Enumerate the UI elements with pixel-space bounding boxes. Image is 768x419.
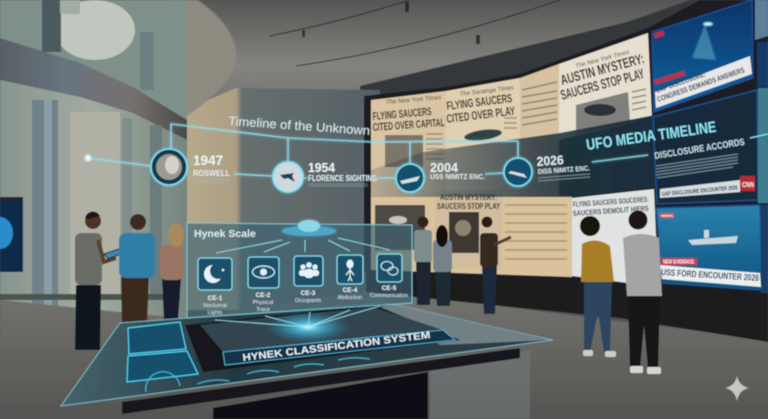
icon card: CE-1 nocturnal lights xyxy=(198,258,232,316)
node: 2004 USS Nimitz: 2004 xyxy=(430,160,459,175)
glass legs xyxy=(430,350,530,419)
person: visitor in grey xyxy=(414,216,432,305)
lower glass wall xyxy=(0,80,187,332)
newspaper: flying saucers play: CITED OVER PLAY xyxy=(446,104,516,126)
icon card: CE-4 abduction: CE-4 xyxy=(343,287,358,294)
screen: USS Ford encounter xyxy=(656,205,762,290)
newspaper: austin mystery lower xyxy=(435,190,502,268)
person: man with tablet xyxy=(75,212,126,350)
wall screen: earth display xyxy=(0,197,23,272)
newspaper: flying saucers capital: The New York Times xyxy=(386,95,441,106)
people: right pair xyxy=(580,210,662,374)
icon card: CE-1 nocturnal lights: Nocturnal xyxy=(203,303,227,309)
newspaper: flying saucers capital: FLYING SAUCERS xyxy=(372,106,432,123)
glow rays xyxy=(215,306,380,327)
icon card: CE-2 physical trace: CE-2 xyxy=(256,292,271,299)
table underside beam xyxy=(122,348,520,414)
newspaper: flying saucers play: FLYING SAUCERS xyxy=(446,91,513,113)
translucent timeline band xyxy=(371,115,657,197)
rotunda overhang xyxy=(167,0,236,116)
side screens strip xyxy=(750,0,768,293)
media wall frame xyxy=(364,0,768,300)
node: 1954 Florence sighting xyxy=(273,160,377,192)
right glass reflection xyxy=(380,303,552,345)
newspaper: lower wide xyxy=(371,196,572,277)
icon card: CE-5 communication xyxy=(370,254,408,299)
newspaper: flying saucers play: The Saratoga Times xyxy=(460,85,514,98)
icon card: CE-5 communication: CE-5 xyxy=(382,285,397,292)
upper glass gallery xyxy=(0,0,187,120)
screen: disclosure accords xyxy=(585,90,758,204)
sparkle mark xyxy=(725,376,749,401)
node: 1954 Florence sighting: FLORENCE SIGHTING xyxy=(308,174,377,183)
screen: disclosure accords: CNN xyxy=(742,182,754,189)
icon: flying saucer xyxy=(282,220,336,236)
newspaper: austin mystery top: AUSTIN MYSTERY: xyxy=(559,50,646,88)
icon card: CE-4 abduction xyxy=(337,255,363,301)
screen: USS Ford encounter: NEWS xyxy=(661,213,673,218)
hynek scale panel xyxy=(187,220,412,318)
newspaper: flying saucers play xyxy=(446,78,520,200)
node: 1947 Roswell: ROSWELL xyxy=(193,169,230,178)
people: center group xyxy=(414,216,511,314)
icon card: CE-3 occupants: Occupants xyxy=(295,298,321,304)
icon card: CE-1 nocturnal lights: CE-1 xyxy=(208,295,223,302)
person: man in blue shirt xyxy=(119,214,155,324)
newspaper: austin mystery lower: AUSTIN MYSTERY: xyxy=(440,193,497,202)
node: 2026 USS Nimitz: 2026 xyxy=(536,152,564,169)
newspaper wall xyxy=(371,33,658,283)
right news screens xyxy=(585,0,768,293)
left control screens xyxy=(127,322,198,382)
metal fascia band xyxy=(0,38,187,140)
back wall xyxy=(180,88,380,310)
person: woman in yellow xyxy=(580,216,616,357)
ceiling xyxy=(0,0,768,130)
person: woman xyxy=(160,223,184,320)
newspaper: saucers demolit xyxy=(572,189,658,283)
panel heading: Hynek Scale xyxy=(194,228,256,240)
node: 1947 Roswell xyxy=(151,149,231,185)
icon card: CE-3 occupants xyxy=(294,256,323,304)
front screen icons xyxy=(146,358,370,392)
icon card: CE-4 abduction: Abduction xyxy=(338,295,362,301)
screen: disclosure accords: UAP DISCLOSURE ENCOUNTER 2026 xyxy=(662,185,738,198)
newspaper: flying saucers capital xyxy=(371,91,446,200)
central console xyxy=(185,305,460,372)
icon card: CE-2 physical trace: Physical xyxy=(253,300,273,306)
node: 2004 USS Nimitz xyxy=(396,160,485,192)
node: 2026 USS Nimitz: DISS NIMITZ ENC. xyxy=(538,165,590,176)
console label xyxy=(223,330,455,365)
node: 1947 Roswell: 1947 xyxy=(193,152,223,168)
exhibit table xyxy=(61,303,553,419)
icon card: CE-2 physical trace xyxy=(248,257,279,313)
node: 1954 Florence sighting: 1954 xyxy=(308,160,336,175)
glass table top xyxy=(61,303,553,406)
node: 2026 USS Nimitz xyxy=(504,152,590,186)
screen wall base xyxy=(366,270,768,342)
screen: UAP disclosure xyxy=(652,0,753,112)
person: visitor with dark hair xyxy=(433,225,452,306)
console label: HYNEK CLASSIFICATION SYSTEM xyxy=(242,330,431,364)
radiating beams xyxy=(216,238,390,253)
heading: UFO media timeline: UFO MEDIA TIMELINE xyxy=(585,119,717,154)
icon card: CE-5 communication: Communication xyxy=(370,293,408,299)
node: 2004 USS Nimitz: USS NIMITZ ENC. xyxy=(430,174,485,181)
newspaper: austin mystery top: SAUCERS STOP PLAY xyxy=(559,65,646,103)
newspaper: austin mystery top xyxy=(559,33,652,140)
table pedestal xyxy=(213,372,428,419)
timeline connector lines xyxy=(88,124,648,178)
icon card: CE-2 physical trace: Trace xyxy=(256,307,270,313)
icon card: CE-3 occupants: CE-3 xyxy=(301,290,316,297)
console screen xyxy=(200,307,443,352)
timeline of the unknown xyxy=(85,114,648,192)
person: man in grey tee xyxy=(623,210,662,374)
newspaper: saucers demolit: FLYING SAUCERS SOUCERES: xyxy=(573,195,649,209)
newspaper: austin mystery lower: SAUCERS STOP PLAY xyxy=(437,202,500,211)
newspaper: saucers demolit: SAUCERS DEMOLIT HIERS xyxy=(573,204,649,218)
timeline title: Timeline of the Unknown xyxy=(228,114,370,138)
person: visitor pointing xyxy=(480,216,511,314)
icon card: CE-1 nocturnal lights: Lights xyxy=(208,310,223,316)
node dot xyxy=(85,155,91,161)
screen: USS Ford encounter: NEW EVIDENCE: xyxy=(663,260,695,266)
newspaper: column xyxy=(520,64,559,200)
newspaper: austin mystery top: The New York Times xyxy=(575,50,630,70)
central glow xyxy=(266,311,350,343)
floor xyxy=(0,290,768,419)
people: left trio xyxy=(75,212,184,350)
screen: UAP disclosure: UAP DISCLOSURE: xyxy=(655,71,707,95)
subheading: disclosure accords: DISCLOSURE ACCORDS xyxy=(654,137,745,162)
newspaper: flying saucers capital: CITED OVER CAPITAL xyxy=(372,117,445,134)
